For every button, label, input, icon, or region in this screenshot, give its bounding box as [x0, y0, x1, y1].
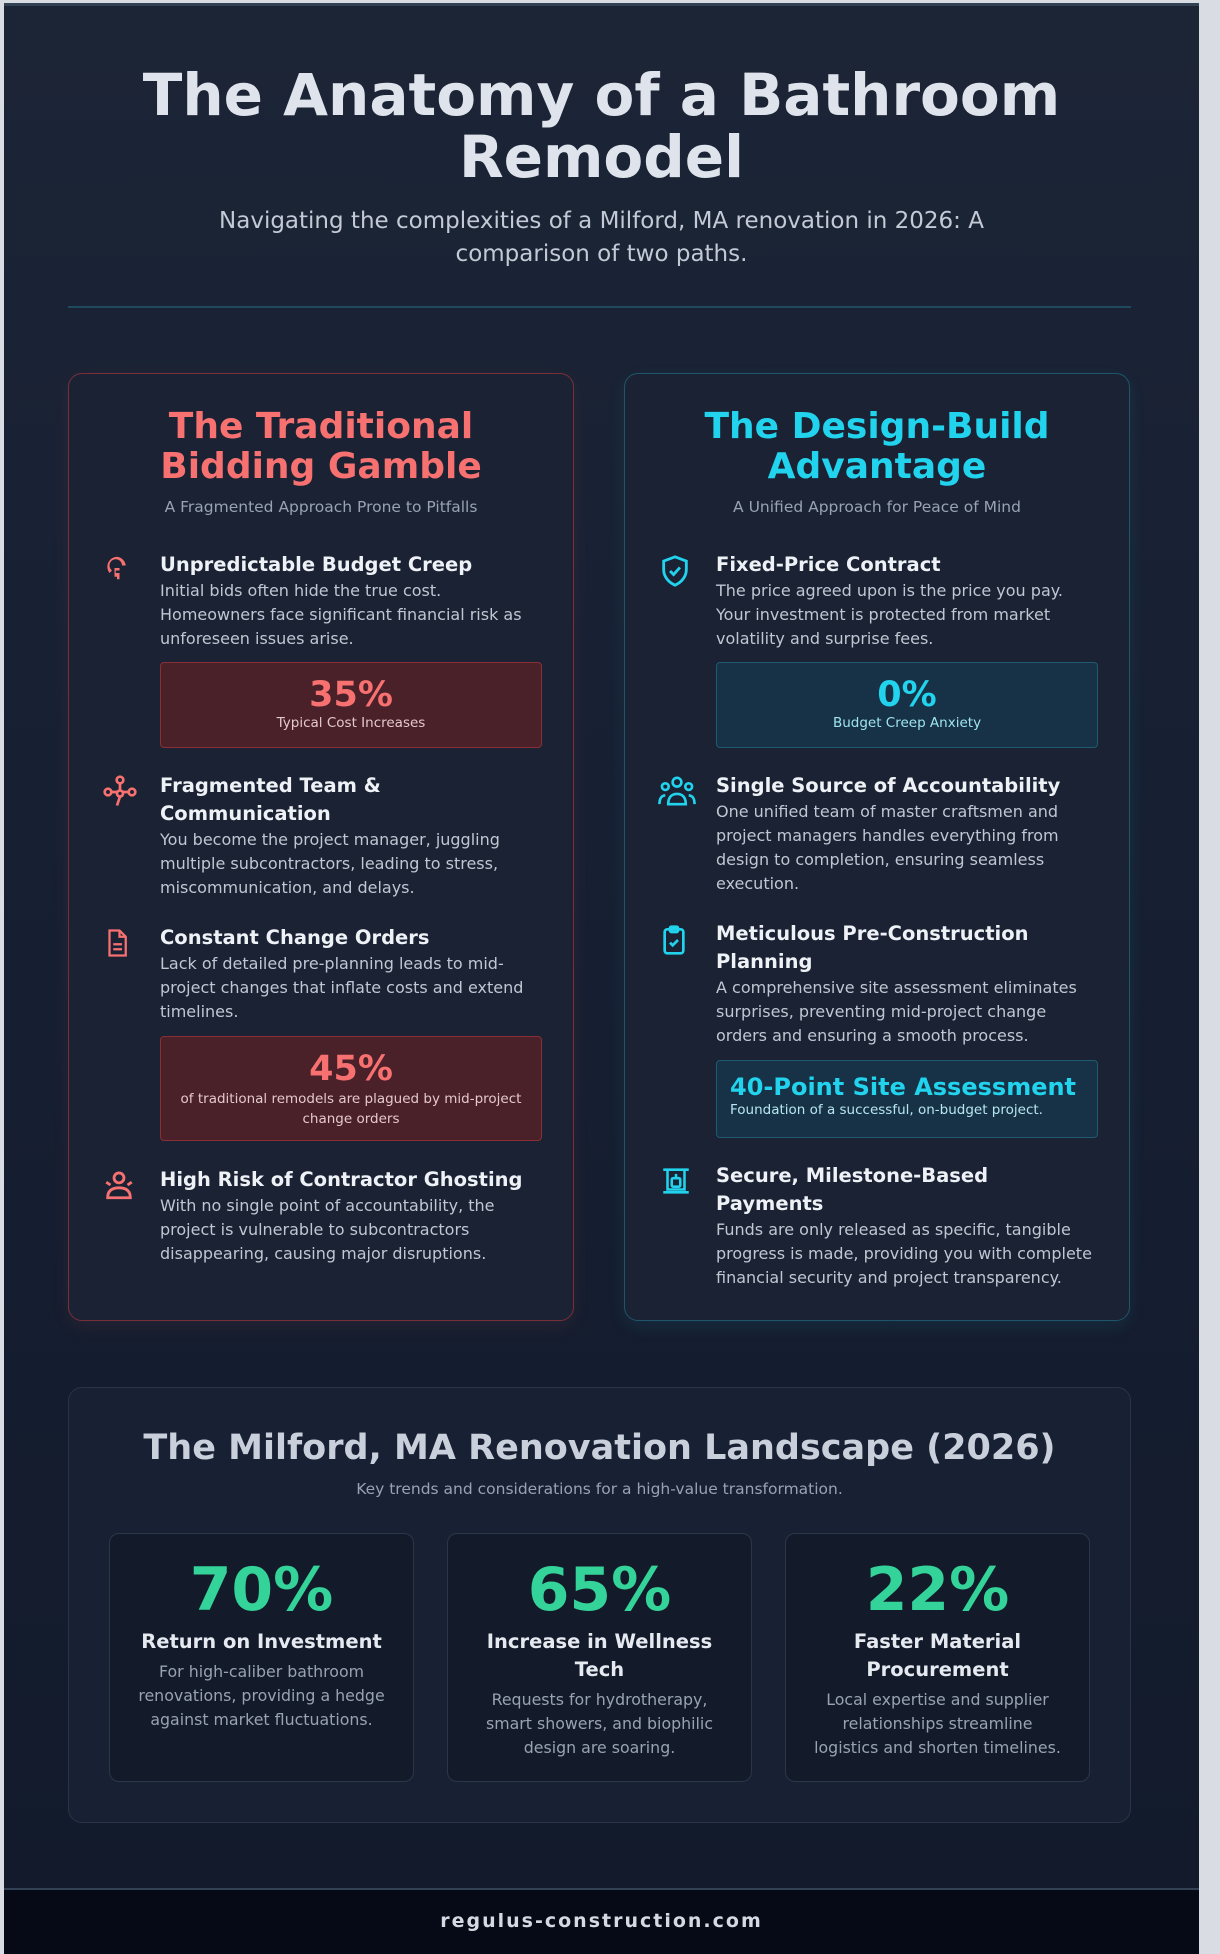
item: planning	[663, 922, 1077, 1045]
item: payments: Funds are only released as specific, tangible progress is made, providing you with complete financial security and project transparency.	[716, 1220, 1092, 1287]
item: accountability: One unified team of master craftsmen and project managers handles everything from design to completion, ensuring seamless execution.	[716, 802, 1059, 893]
stat: 45%	[160, 1036, 542, 1141]
stat card: wellness: Increase in Wellness Tech	[487, 1630, 712, 1681]
item: payments: Secure, Milestone-Based Payments	[716, 1164, 988, 1215]
icon: shield	[662, 555, 688, 587]
title: Remodel	[459, 123, 744, 191]
stat card: ROI: Return on Investment	[141, 1630, 382, 1653]
item: budget creep	[107, 553, 522, 648]
panel: landscape	[68, 1387, 1131, 1823]
icon: team	[658, 776, 696, 806]
icon: person alert	[106, 1172, 132, 1200]
stat card: wellness: 65%	[528, 1555, 671, 1625]
item: fixed price: Fixed-Price Contract	[716, 553, 941, 576]
stat: 45%: of traditional remodels are plagued by mid-project change orders	[181, 1091, 521, 1127]
icon: payment	[663, 1168, 689, 1194]
item: ghosting	[106, 1168, 522, 1263]
item: budget creep: Unpredictable Budget Creep	[160, 553, 472, 576]
item: planning: A comprehensive site assessment eliminates surprises, preventing mid-project change orders and ensuring a smooth process.	[716, 978, 1077, 1045]
item: fixed price	[662, 553, 1063, 648]
item: change orders	[108, 926, 523, 1021]
item: ghosting: With no single point of accountability, the project is vulnerable to subcontractors disappearing, causing major disruptions.	[160, 1196, 494, 1263]
stat card: procurement: Faster Material Procurement	[854, 1630, 1021, 1681]
stat card: wellness	[447, 1533, 752, 1782]
item: accountability	[658, 774, 1060, 893]
stat card: procurement: Local expertise and supplier relationships streamline logistics and shorten timelines.	[814, 1690, 1061, 1757]
title	[143, 61, 1060, 191]
item: payments	[663, 1164, 1092, 1287]
stat: 0%: Budget Creep Anxiety	[833, 715, 981, 731]
item: fixed price: The price agreed upon is the price you pay. Your investment is protected from market volatility and surprise fees.	[716, 581, 1063, 648]
stat: 0%	[716, 662, 1098, 748]
stat: 35%: 35%	[309, 675, 393, 715]
stat card: procurement	[785, 1533, 1090, 1782]
icon: clipboard	[663, 925, 685, 955]
heading: design-build: The Design-Build	[704, 406, 1050, 447]
stat card: wellness: Requests for hydrotherapy, smart showers, and biophilic design are soaring.	[486, 1690, 713, 1757]
panel: traditional bidding	[68, 373, 574, 1321]
subheading: A Fragmented Approach Prone to Pitfalls	[165, 498, 477, 516]
item: fragmented team: Fragmented Team & Communication	[160, 774, 381, 825]
heading: traditional	[160, 406, 482, 487]
heading: design-build	[704, 406, 1050, 487]
item: accountability: Single Source of Accountability	[716, 774, 1060, 797]
stat: 35%	[160, 662, 542, 748]
footer	[4, 1888, 1199, 1954]
subtitle: Navigating the complexities of a Milford, MA renovation in 2026: A comparison of two paths.	[219, 208, 984, 267]
stat: 40-point: 40-Point Site Assessment	[730, 1073, 1076, 1101]
stat card: ROI	[109, 1533, 414, 1782]
stat card: procurement: 22%	[866, 1555, 1009, 1625]
subheading: Key trends and considerations for a high-value transformation.	[356, 1480, 843, 1498]
panel: design-build	[624, 373, 1130, 1321]
stat card: ROI: For high-caliber bathroom renovations, providing a hedge against market fluctuations.	[138, 1662, 385, 1729]
heading: design-build: Advantage	[768, 446, 986, 487]
item: change orders: Constant Change Orders	[160, 926, 429, 949]
footer: regulus-construction.com	[440, 1910, 763, 1932]
title: The Anatomy of a Bathroom	[143, 61, 1060, 129]
heading: traditional: Bidding Gamble	[160, 446, 482, 487]
item: budget creep: Initial bids often hide the true cost. Homeowners face significant financial risk as unforeseen issues arise.	[160, 581, 522, 648]
heading: traditional: The Traditional	[169, 406, 473, 447]
item: change orders: Lack of detailed pre-planning leads to mid-project changes that inflate costs and extend timelines.	[160, 954, 523, 1021]
item: ghosting: High Risk of Contractor Ghosting	[160, 1168, 522, 1191]
stat: 40-point: Foundation of a successful, on-budget project.	[730, 1102, 1043, 1118]
stat: 45%: 45%	[309, 1049, 393, 1089]
stat card: ROI: 70%	[190, 1555, 333, 1625]
stat: 35%: Typical Cost Increases	[277, 715, 425, 731]
stat: 40-point	[716, 1060, 1098, 1138]
stat: 0%: 0%	[877, 675, 937, 715]
item: fragmented team: You become the project manager, juggling multiple subcontractors, leading to stress, miscommunication, and delays.	[160, 830, 500, 897]
icon: money	[107, 556, 126, 580]
heading: landscape: The Milford, MA Renovation Landscape (2026)	[143, 1428, 1056, 1468]
icon: network	[103, 775, 137, 806]
icon: document	[108, 929, 127, 957]
item: fragmented team	[103, 774, 500, 897]
item: planning: Meticulous Pre-Construction Planning	[716, 922, 1029, 973]
subheading: A Unified Approach for Peace of Mind	[733, 498, 1021, 516]
